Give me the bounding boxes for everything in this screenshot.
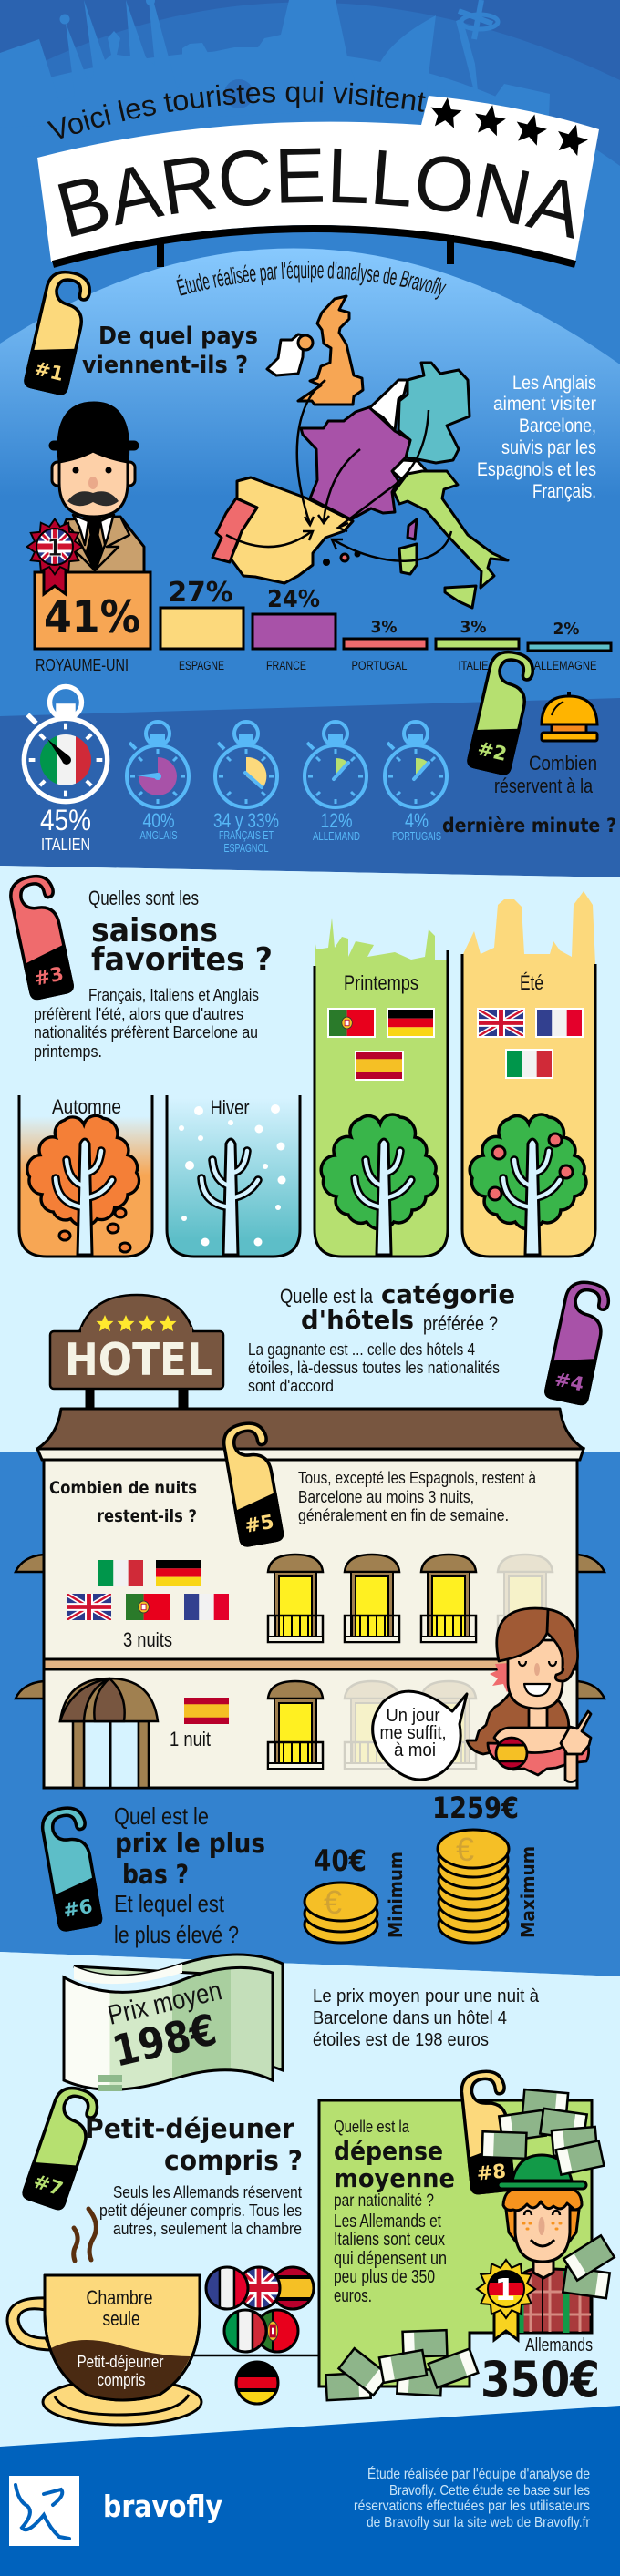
bar values: 41% — [44, 591, 140, 643]
heading: prix le plus bas: le plus élevé ? — [114, 1921, 239, 1948]
jacket — [46, 517, 144, 572]
panel: printemps — [315, 918, 448, 1257]
hotel door — [60, 1678, 158, 1788]
bar france — [253, 614, 336, 649]
cornice — [37, 1449, 584, 1460]
eyes nose mustache — [73, 467, 78, 474]
map arrows — [226, 380, 451, 561]
tree crown — [27, 1115, 139, 1226]
coffee cup: Petit-déjeuner — [77, 2353, 164, 2371]
stopwatch: italien 45% — [24, 686, 108, 854]
bar labels: FRANCE — [266, 658, 306, 672]
tree crown — [470, 1114, 586, 1229]
text: la gagnante: étoiles, là-dessus toutes les nationalités — [248, 1359, 500, 1377]
hotel sign — [50, 1295, 223, 1414]
heading: categorie d'hotels: Quelle est la — [280, 1285, 374, 1308]
plaid shirt — [518, 2269, 591, 2333]
heading: saisons favorites: saisons — [91, 912, 218, 949]
text: seasons description: préfèrent l'été, alors que d'autres — [34, 1005, 243, 1023]
german tourist — [498, 2155, 591, 2333]
bar royaume-uni — [35, 572, 150, 649]
stopwatch: italien 45%: ITALIEN — [41, 836, 90, 854]
text: les anglais: Les Anglais — [512, 373, 596, 394]
text: la gagnante: La gagnante est ... celle des hôtels 4 — [248, 1340, 475, 1359]
coins: minimum: Minimum — [385, 1852, 407, 1938]
heading: depense moyenne — [334, 2118, 455, 2211]
heading: petit dejeuner: compris ? — [164, 2145, 303, 2176]
panel: blue hotel background — [0, 1452, 620, 1976]
text: tous excepte: Barcelone au moins 3 nuits, — [298, 1488, 474, 1506]
title line: Voici les touristes qui visitent — [46, 81, 426, 139]
speech bubble: Un jour — [387, 1706, 440, 1726]
stopwatch: francais et espagnol: 34 y 33% — [213, 809, 279, 832]
bar portugal — [344, 639, 427, 649]
text: seasons description: nationalités préfèrent Barcelone au — [34, 1023, 258, 1042]
hanger #5 — [221, 1421, 284, 1546]
hand — [561, 1711, 591, 1754]
map of europe — [212, 296, 508, 608]
hair sides — [506, 2210, 579, 2244]
united kingdom — [298, 296, 363, 405]
medal: germany rank 1: 1 — [495, 2272, 515, 2307]
coins: minimum — [305, 1843, 407, 1943]
text: les allemands et italiens: qui dépensent un — [334, 2249, 447, 2269]
value: 350 euros: Allemands — [525, 2335, 593, 2355]
text: combien reservent: Combien — [529, 752, 597, 775]
heading: categorie d'hotels: d'hôtels — [301, 1305, 414, 1335]
flag italy — [505, 1049, 553, 1079]
text: les anglais — [477, 373, 596, 502]
heading: petit dejeuner — [85, 2113, 303, 2176]
ears — [52, 462, 65, 486]
flag: 1 nuit: 1 nuit — [170, 1728, 211, 1750]
text: les allemands et italiens: peu plus de 350 — [334, 2267, 435, 2287]
panel: depense moyenne — [319, 2100, 592, 2386]
heading: depense moyenne: Quelle est la — [334, 2118, 410, 2136]
text: les allemands et italiens: euros. — [334, 2286, 372, 2306]
pile of banknotes — [326, 2330, 478, 2400]
flag germany — [387, 1008, 435, 1038]
eyes — [519, 1661, 556, 1666]
neck and shirt — [73, 515, 88, 545]
heading: prix le plus bas — [114, 1802, 265, 1948]
bar values: 3% — [460, 618, 487, 637]
eyes — [524, 2211, 560, 2215]
heading: categorie d'hotels — [280, 1279, 515, 1335]
sicily — [445, 586, 476, 608]
footer credit text: Bravofly. Cette étude se base sur les — [389, 2483, 590, 2499]
panel: ete: Été — [520, 971, 543, 994]
heading: de quel pays — [82, 323, 258, 379]
text: les anglais: aiment visiter — [493, 394, 596, 415]
bar chart — [35, 572, 611, 651]
heading: categorie d'hotels: préférée ? — [423, 1312, 498, 1335]
text: seuls les allemands — [99, 2183, 302, 2238]
hanger #6 — [39, 1805, 103, 1931]
hair top — [497, 1608, 578, 1681]
tree trunk — [503, 1139, 560, 1255]
neck — [533, 2258, 553, 2278]
snowflakes — [179, 1104, 286, 1247]
spain — [231, 477, 353, 583]
text: prix moyen — [313, 1986, 540, 2050]
coins: maximum: 1259€ — [432, 1791, 519, 1825]
tie — [87, 519, 103, 568]
heading: combien de nuits: restent-ils ? — [97, 1506, 197, 1526]
bar italie — [436, 639, 519, 649]
france — [301, 407, 410, 519]
text: seuls les allemands: petit déjeuner compris. Tous les — [99, 2201, 302, 2220]
bar labels: ESPAGNE — [179, 658, 224, 672]
handle — [7, 2298, 51, 2350]
speech bubble: à moi — [394, 1740, 436, 1760]
text: seasons description — [34, 986, 259, 1061]
medal: uk rank 1: 1 — [46, 535, 63, 562]
nose — [538, 2217, 545, 2235]
stopwatch: francais et espagnol: ESPAGNOL — [224, 841, 268, 855]
flags: 3 nuits: 3 nuits — [123, 1628, 172, 1651]
flag fan — [497, 1739, 526, 1768]
hanger #3 — [7, 873, 74, 1000]
banknote: Prix moyen — [105, 1976, 224, 2031]
text: tous excepte: généralement en fin de semaine. — [298, 1506, 509, 1524]
balearic islands — [325, 552, 359, 565]
text: tous excepte — [298, 1469, 537, 1524]
title banner — [37, 81, 599, 300]
bar labels: ALLEMAGNE — [534, 658, 596, 672]
logo: bravofly mark — [9, 2476, 79, 2546]
bar labels — [36, 656, 596, 674]
benelux — [369, 380, 408, 431]
coffee cup — [7, 2275, 202, 2425]
smile — [524, 1684, 550, 1696]
flags: 3 nuits — [67, 1560, 229, 1651]
study credit: Étude réalisée par l'équipe d'analyse de Bravofly — [176, 261, 447, 300]
heading: combien de nuits — [49, 1478, 197, 1526]
panel: ete — [462, 891, 595, 1257]
bowler hat — [58, 403, 129, 462]
stopwatch: portugais 4%: PORTUGAIS — [392, 829, 441, 843]
chest — [494, 1728, 573, 1753]
text: la gagnante — [248, 1340, 500, 1395]
stopwatch: francais et espagnol — [213, 722, 279, 855]
banner supports — [53, 229, 575, 267]
text: seasons description: Français, Italiens et Anglais — [88, 986, 259, 1004]
city name: BARCELLONA — [58, 148, 574, 239]
bar labels: ITALIE — [458, 658, 489, 672]
bar values: 3% — [370, 618, 398, 637]
text: prix moyen: Barcelone dans un hôtel 4 — [313, 2008, 507, 2028]
coins: maximum: € — [456, 1831, 474, 1868]
flying banknotes — [482, 2089, 615, 2298]
value: 350 euros: 350€ — [480, 2351, 600, 2408]
speech bubble: me suffit, — [379, 1723, 447, 1743]
bar values: 2% — [553, 620, 580, 639]
hotel sign: HOTEL — [65, 1334, 212, 1386]
hotel building — [37, 1409, 584, 1788]
arm — [565, 1752, 577, 1782]
smile — [531, 2240, 554, 2246]
wall — [44, 1460, 577, 1788]
text: les allemands et italiens: Les Allemands et — [334, 2212, 441, 2232]
heading: de quel pays: viennent-ils ? — [82, 352, 248, 379]
bar espagne — [160, 608, 243, 649]
coffee steam — [74, 2209, 96, 2261]
neck — [529, 1704, 547, 1729]
panel: light price background — [0, 1952, 620, 2447]
coins: minimum: € — [324, 1883, 342, 1921]
bar values: 24% — [267, 586, 320, 613]
hanger #1: #1 — [32, 357, 66, 385]
flower — [490, 1663, 512, 1692]
stopwatch: allemand 12%: ALLEMAND — [313, 829, 360, 843]
tree crown — [321, 1114, 438, 1229]
face — [59, 446, 128, 517]
nose — [534, 1663, 540, 1676]
bar labels: ROYAUME-UNI — [36, 656, 129, 674]
medal: uk rank 1 — [27, 519, 82, 594]
stopwatch: portugais 4%: 4% — [405, 809, 429, 832]
coffee cup: seule — [102, 2307, 140, 2330]
panel: printemps: Printemps — [344, 971, 418, 994]
four stars — [429, 96, 591, 158]
text: prix moyen: Le prix moyen pour une nuit à — [313, 1986, 540, 2006]
text: la gagnante: sont d'accord — [248, 1377, 334, 1395]
spanish woman — [467, 1608, 591, 1782]
flag uk — [477, 1008, 525, 1038]
text: tous excepte: Tous, excepté les Espagnols, restent à — [298, 1469, 537, 1487]
bar labels: PORTUGAL — [352, 658, 408, 672]
flag circles — [205, 2266, 315, 2405]
hanger #1 — [25, 268, 93, 395]
banknote: 198€ — [108, 2005, 222, 2078]
face — [508, 1640, 563, 1709]
green hat — [512, 2155, 572, 2181]
long hair — [467, 1692, 569, 1754]
heading: depense moyenne: dépense — [334, 2136, 443, 2166]
hanger #2 — [468, 648, 536, 775]
floor band — [44, 1659, 577, 1669]
stopwatch: anglais 40%: ANGLAIS — [140, 828, 178, 842]
skyline: sagrada familia and palace — [0, 0, 365, 128]
flag portugal — [327, 1008, 376, 1038]
skyline: dome and communications tower — [367, 15, 550, 118]
cup body — [45, 2275, 200, 2400]
text: seasons description: printemps. — [34, 1042, 102, 1061]
medal: germany rank 1 — [477, 2260, 535, 2340]
italy — [394, 471, 508, 588]
logo: bravofly wordmark: bravofly — [103, 2489, 222, 2524]
northern ireland — [298, 335, 313, 350]
hanger #2: #2 — [475, 737, 509, 765]
hanger #4: #4 — [553, 1368, 586, 1396]
connector line — [191, 2355, 319, 2356]
icon: reception bell — [542, 692, 597, 741]
text: combien reservent — [442, 752, 616, 836]
heading: saisons favorites: favorites ? — [91, 941, 273, 979]
text: les allemands et italiens: Italiens sont ceux — [334, 2230, 445, 2250]
stopwatch: anglais 40%: 40% — [142, 809, 175, 832]
text: les allemands et italiens — [334, 2212, 447, 2306]
germany — [398, 363, 470, 463]
panel: last minute band — [0, 698, 620, 877]
corsica — [408, 519, 417, 539]
coffee cup: compris — [97, 2371, 146, 2389]
hanger #8: #8 — [476, 2160, 507, 2185]
stopwatch: francais et espagnol: FRANÇAIS ET — [219, 828, 274, 842]
coffee cup: Chambre — [86, 2286, 153, 2309]
british tourist — [46, 403, 144, 572]
panel: hiver: Hiver — [210, 1096, 250, 1119]
panel: automne: Automne — [52, 1095, 121, 1118]
hanger #7 — [22, 2083, 102, 2211]
saucer — [43, 2379, 202, 2425]
roof — [37, 1409, 584, 1449]
tree trunk — [355, 1139, 411, 1255]
lapels — [96, 517, 129, 570]
side awnings — [16, 1555, 604, 1699]
flag spain — [355, 1051, 404, 1081]
background: header sky — [0, 0, 620, 729]
coffee — [51, 2340, 191, 2400]
coins: minimum: 40€ — [314, 1843, 367, 1878]
upper windows — [268, 1555, 553, 1642]
heading: combien de nuits: Combien de nuits — [49, 1478, 197, 1498]
text: seuls les allemands: autres, seulement la chambre — [113, 2220, 302, 2238]
heading: de quel pays: De quel pays — [98, 323, 258, 350]
freckles — [523, 2223, 561, 2229]
hair fringe — [503, 2190, 582, 2211]
face — [515, 2203, 570, 2262]
switzerland — [392, 460, 427, 480]
fruit — [489, 1134, 573, 1200]
text: les anglais: Barcelone, — [519, 416, 596, 436]
bar values — [44, 577, 580, 643]
text: les anglais: Espagnols et les — [477, 459, 596, 480]
dress — [488, 1743, 589, 1775]
heading: depense moyenne: moyenne — [334, 2163, 455, 2193]
footer credit text: de Bravofly sur la site web de Bravofly.fr — [367, 2515, 591, 2530]
heading: prix le plus bas: Et lequel est — [114, 1890, 225, 1917]
hanger #3: #3 — [32, 962, 66, 990]
stopwatch: allemand 12% — [305, 722, 367, 843]
heading: saisons favorites — [88, 887, 273, 979]
portugal — [212, 498, 257, 562]
hanger #5: #5 — [243, 1511, 275, 1537]
coins: maximum: Maximum — [517, 1846, 539, 1938]
heading: prix le plus bas: bas ? — [122, 1859, 189, 1890]
heading: petit dejeuner: Petit-déjeuner — [85, 2113, 295, 2144]
banknote — [64, 1955, 283, 2091]
text: les anglais: suivis par les — [501, 437, 596, 458]
flag: 1 nuit — [170, 1698, 229, 1750]
hanger #8 — [460, 2069, 515, 2193]
stopwatch: italien 45%: 45% — [40, 804, 91, 836]
panel: hiver — [167, 1095, 300, 1257]
text: combien reservent: réservent à la — [494, 775, 594, 797]
coins: maximum — [432, 1791, 539, 1943]
stopwatch: allemand 12%: 12% — [321, 809, 352, 832]
falling leaves — [59, 1208, 130, 1252]
heading: categorie d'hotels: catégorie — [381, 1279, 515, 1309]
text: seuls les allemands: Seuls les Allemands réservent — [113, 2183, 302, 2201]
sardinia — [399, 544, 417, 574]
heading: prix le plus bas: Quel est le — [114, 1802, 209, 1830]
bar values: 27% — [168, 577, 233, 609]
lower windows — [268, 1681, 476, 1769]
tree trunk — [56, 1139, 112, 1255]
hanger #7: #7 — [31, 2171, 66, 2201]
flag france — [535, 1008, 584, 1038]
stopwatch: anglais 40% — [127, 722, 189, 842]
hanger #6: #6 — [61, 1895, 94, 1922]
panel: seasons background — [0, 866, 620, 1452]
banner board — [37, 96, 599, 262]
bar allemagne — [528, 643, 611, 651]
footer credit text: réservations effectuées par les utilisateurs — [354, 2499, 590, 2514]
panel: automne — [19, 1095, 152, 1257]
heading: depense moyenne: par nationalité ? — [334, 2191, 434, 2211]
bare tree — [202, 1139, 258, 1255]
footer credit text: Étude réalisée par l'équipe d'analyse de — [367, 2465, 590, 2482]
hanger #4 — [545, 1278, 612, 1405]
heading: prix le plus bas: prix le plus — [115, 1828, 265, 1859]
speech bubble — [373, 1691, 467, 1780]
stopwatch: portugais 4% — [385, 722, 447, 843]
footer credit text — [354, 2465, 591, 2530]
text: les anglais: Français. — [532, 481, 596, 502]
footer band — [0, 2406, 620, 2576]
ireland — [267, 334, 304, 375]
heading: saisons favorites: Quelles sont les — [88, 887, 199, 909]
text: prix moyen: étoiles est de 198 euros — [313, 2030, 489, 2050]
